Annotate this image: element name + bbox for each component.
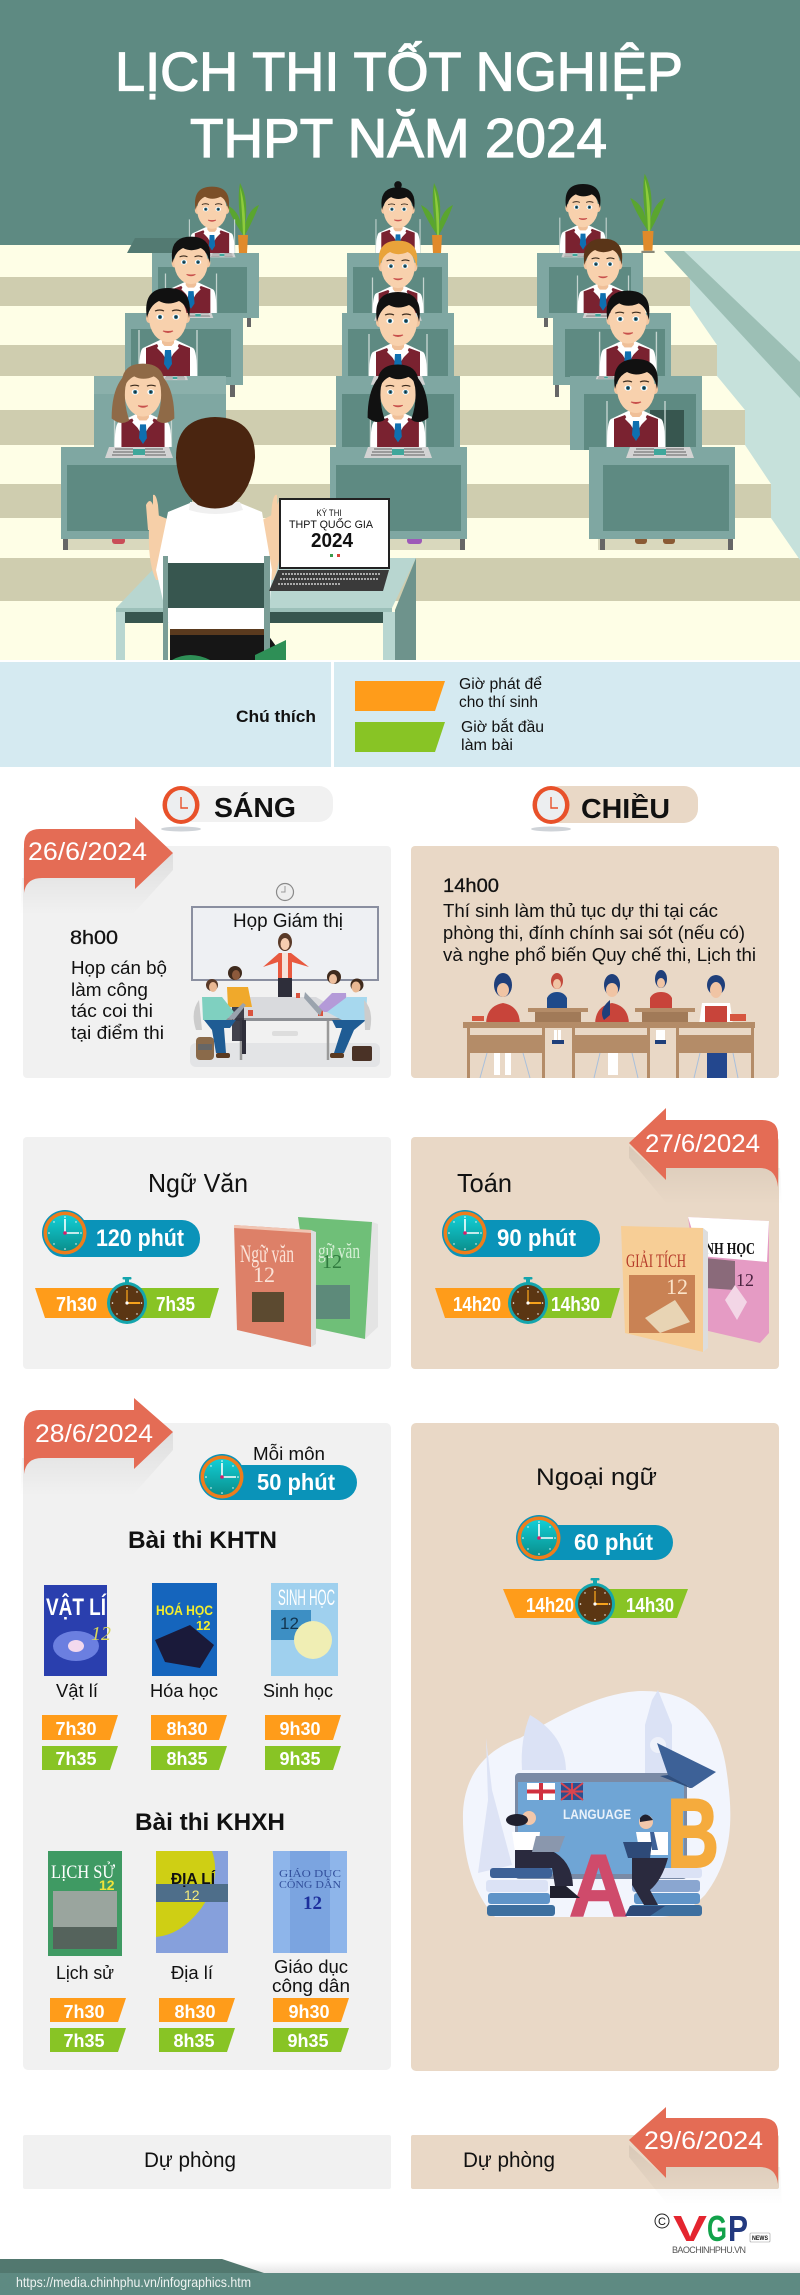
subject: Physics: 7h35 xyxy=(55,1749,97,1769)
meeting illustration: Họp Giám thị xyxy=(233,911,343,932)
VGP logo: BAOCHINHPHU.VN xyxy=(672,2245,746,2255)
subject: Chemistry: 8h30 xyxy=(166,1719,208,1739)
time bar: 7h35 xyxy=(156,1294,195,1316)
row 4 desks xyxy=(152,253,643,327)
subject: Biology xyxy=(263,1583,341,1770)
subject: Physics xyxy=(42,1585,118,1770)
VGP logo: G xyxy=(707,2208,727,2249)
subject: Chemistry: 8h35 xyxy=(166,1749,208,1769)
meeting time text: tác coi thi xyxy=(71,1001,153,1021)
subject: Biology: 9h35 xyxy=(279,1749,321,1769)
front row students xyxy=(112,359,684,450)
panel: 29/6 morning, reserve: Dự phòng xyxy=(144,2149,236,2172)
date arrow 26/6: 26/6/2024 xyxy=(28,838,147,866)
subject: Biology: SINH HỌC xyxy=(278,1585,335,1610)
legend: distribution time xyxy=(355,676,542,711)
laptop: THPT QUỐC GIA xyxy=(289,517,374,531)
subject: Geography xyxy=(156,1851,235,2052)
duration per subject: Mỗi môn xyxy=(253,1443,325,1464)
subject: History: Lịch sử xyxy=(56,1963,114,1983)
panel: 26/6 afternoon xyxy=(411,846,779,1078)
legend: start time xyxy=(355,719,544,754)
row 2 desks xyxy=(94,376,702,467)
subject: Geography: 8h35 xyxy=(173,2031,215,2051)
subject: Chemistry xyxy=(150,1583,227,1770)
laptop xyxy=(269,498,390,591)
panel: 29/6 afternoon, reserve xyxy=(411,2135,779,2189)
title: LỊCH THI TỐT NGHIỆP xyxy=(115,40,683,102)
panel: 28/6 morning, combined tests xyxy=(23,1423,391,2070)
heading: afternoon xyxy=(531,786,698,832)
subject: History: 7h30 xyxy=(63,2002,105,2022)
subject: Biology: 12 xyxy=(280,1614,299,1633)
subject: Civics: CÔNG DÂN xyxy=(279,1879,341,1891)
meeting illustration xyxy=(190,884,380,1067)
language learning illustration xyxy=(463,1690,730,1935)
panel: 26/6 morning xyxy=(23,846,391,1078)
teacher seen from behind xyxy=(146,417,286,660)
subject: Chemistry: HOÁ HỌC xyxy=(156,1602,213,1618)
textbooks: GIẢI TÍCH xyxy=(626,1250,686,1272)
heading: KHTN: Bài thi KHTN xyxy=(128,1527,277,1554)
subject: Physics: VẬT LÍ xyxy=(46,1593,107,1621)
date arrow 28/6 xyxy=(20,1398,173,1496)
textbooks: Ngữ văn xyxy=(240,1241,294,1268)
subject: Civics: Giáo dục xyxy=(274,1957,348,1977)
textbooks: 12 xyxy=(736,1270,754,1290)
title xyxy=(115,40,683,169)
date arrow 26/6 xyxy=(20,817,173,915)
duration pill xyxy=(516,1515,673,1561)
panel: 29/6 morning, reserve xyxy=(23,2135,391,2189)
panel: 27/6 afternoon, Math xyxy=(411,1137,779,1369)
textbooks: NH HỌC xyxy=(705,1239,755,1258)
legend: start time: Giờ bắt đầu xyxy=(461,719,544,736)
duration pill: 90 phút xyxy=(497,1225,576,1252)
subject: Civics xyxy=(272,1851,350,2052)
date arrow 27/6: 27/6/2024 xyxy=(645,1130,760,1158)
heading: afternoon: CHIỀU xyxy=(581,793,670,824)
subject: Physics: Vật lí xyxy=(56,1681,98,1701)
subject name: Ngoại ngữ xyxy=(536,1464,657,1491)
time bar xyxy=(503,1578,688,1625)
laptop: KỲ THI xyxy=(316,508,342,518)
subject: Civics: công dân xyxy=(272,1976,350,1996)
meeting time text: Họp cán bộ xyxy=(71,958,167,978)
subject: Geography: ĐỊA LÍ xyxy=(171,1869,216,1888)
panel: 29/6 afternoon, reserve: Dự phòng xyxy=(463,2149,555,2172)
subject: Civics: GIÁO DỤC xyxy=(279,1868,341,1880)
footer xyxy=(0,2259,800,2295)
subject: Geography: 12 xyxy=(184,1887,200,1903)
time bar: 7h30 xyxy=(56,1294,97,1316)
meeting time text: tại điểm thi xyxy=(71,1023,164,1043)
laptop: 2024 xyxy=(311,530,354,552)
textbooks: gữ văn xyxy=(318,1238,360,1263)
heading: morning xyxy=(161,786,333,832)
time bar xyxy=(435,1277,620,1324)
textbooks xyxy=(621,1217,769,1352)
footer: https://media.chinhphu.vn/infographics.htm xyxy=(16,2274,251,2290)
second row students xyxy=(165,237,629,318)
procedure text: Thí sinh làm thủ tục dự thi tại các xyxy=(443,901,718,921)
VGP logo: P xyxy=(728,2208,748,2249)
date arrow 28/6: 28/6/2024 xyxy=(35,1420,153,1448)
subject: History: 7h35 xyxy=(63,2031,105,2051)
subject: Chemistry: Hóa học xyxy=(150,1681,218,1701)
textbooks: 12 xyxy=(253,1262,275,1287)
meeting time text: làm công xyxy=(71,980,148,1000)
row 3 desks xyxy=(125,313,671,397)
teacher desk xyxy=(116,558,416,660)
subject: Geography: Địa lí xyxy=(171,1963,213,1983)
legend: distribution time: cho thí sinh xyxy=(459,694,538,711)
legend: start time: làm bài xyxy=(461,737,513,754)
textbooks: 12 xyxy=(322,1251,342,1273)
subject: Biology: 9h30 xyxy=(279,1719,321,1739)
language learning illustration: LANGUAGE xyxy=(563,1806,631,1822)
subject: History: 12 xyxy=(99,1877,115,1893)
VGP logo xyxy=(655,2208,770,2255)
duration pill: 60 phút xyxy=(574,1529,653,1555)
heading: morning: SÁNG xyxy=(214,792,296,823)
subject name: Ngữ Văn xyxy=(148,1168,248,1198)
subject: Chemistry: 12 xyxy=(196,1618,210,1633)
date arrow 29/6 xyxy=(629,2107,782,2205)
date arrow 27/6 xyxy=(629,1108,782,1205)
textbooks: 12 xyxy=(666,1274,688,1299)
subject: History xyxy=(48,1851,126,2052)
textbooks xyxy=(234,1217,378,1347)
duration pill: 120 phút xyxy=(96,1225,184,1252)
language learning illustration: B xyxy=(667,1778,719,1888)
third row students xyxy=(139,288,656,380)
subject: Geography: 8h30 xyxy=(174,2002,216,2022)
VGP logo: V xyxy=(673,2208,707,2249)
duration per subject xyxy=(199,1443,357,1500)
duration per subject: 50 phút xyxy=(257,1469,335,1495)
procedure text: và nghe phổ biến Quy chế thi, Lịch thi xyxy=(443,945,756,965)
procedure text: phòng thi, đính chính sai sót (nếu có) xyxy=(443,923,745,943)
subject: History: LỊCH SỬ xyxy=(51,1861,115,1883)
students at desks illustration xyxy=(463,970,755,1078)
front row desks xyxy=(61,447,735,550)
hero classroom scene xyxy=(0,0,800,660)
duration pill xyxy=(442,1210,600,1257)
panel: 27/6 morning, Literature xyxy=(23,1137,391,1369)
panel: 28/6 afternoon, Foreign language xyxy=(411,1423,779,2071)
time bar: 14h20 xyxy=(453,1294,501,1316)
date arrow 29/6: 29/6/2024 xyxy=(644,2127,763,2155)
duration pill xyxy=(42,1210,200,1257)
legend: distribution time: Giờ phát để xyxy=(459,676,542,693)
VGP logo: C xyxy=(658,2216,666,2228)
subject: Physics: 7h30 xyxy=(55,1719,97,1739)
subject: Civics: 9h30 xyxy=(288,2002,330,2022)
time bar: 14h30 xyxy=(626,1595,674,1617)
time bar xyxy=(35,1277,219,1324)
back row students xyxy=(189,181,606,255)
heading: KHXH: Bài thi KHXH xyxy=(135,1809,285,1836)
meeting time text: 8h00 xyxy=(70,928,118,949)
time bar: 14h20 xyxy=(526,1595,574,1617)
plants xyxy=(227,174,666,255)
VGP logo: NEWS xyxy=(752,2235,769,2242)
subject: Biology: Sinh học xyxy=(263,1681,333,1701)
title: THPT NĂM 2024 xyxy=(190,107,607,169)
time bar: 14h30 xyxy=(551,1294,600,1316)
subject: Civics: 12 xyxy=(303,1893,322,1914)
subject: Physics: 12 xyxy=(91,1623,111,1645)
legend: Chú thích xyxy=(236,707,316,726)
procedure text xyxy=(443,876,756,965)
subject: Civics: 9h35 xyxy=(287,2031,329,2051)
subject name: Toán xyxy=(457,1168,512,1198)
language learning illustration: A xyxy=(569,1836,628,1935)
meeting time text xyxy=(70,928,167,1043)
procedure text: 14h00 xyxy=(443,876,499,897)
legend xyxy=(0,662,800,767)
